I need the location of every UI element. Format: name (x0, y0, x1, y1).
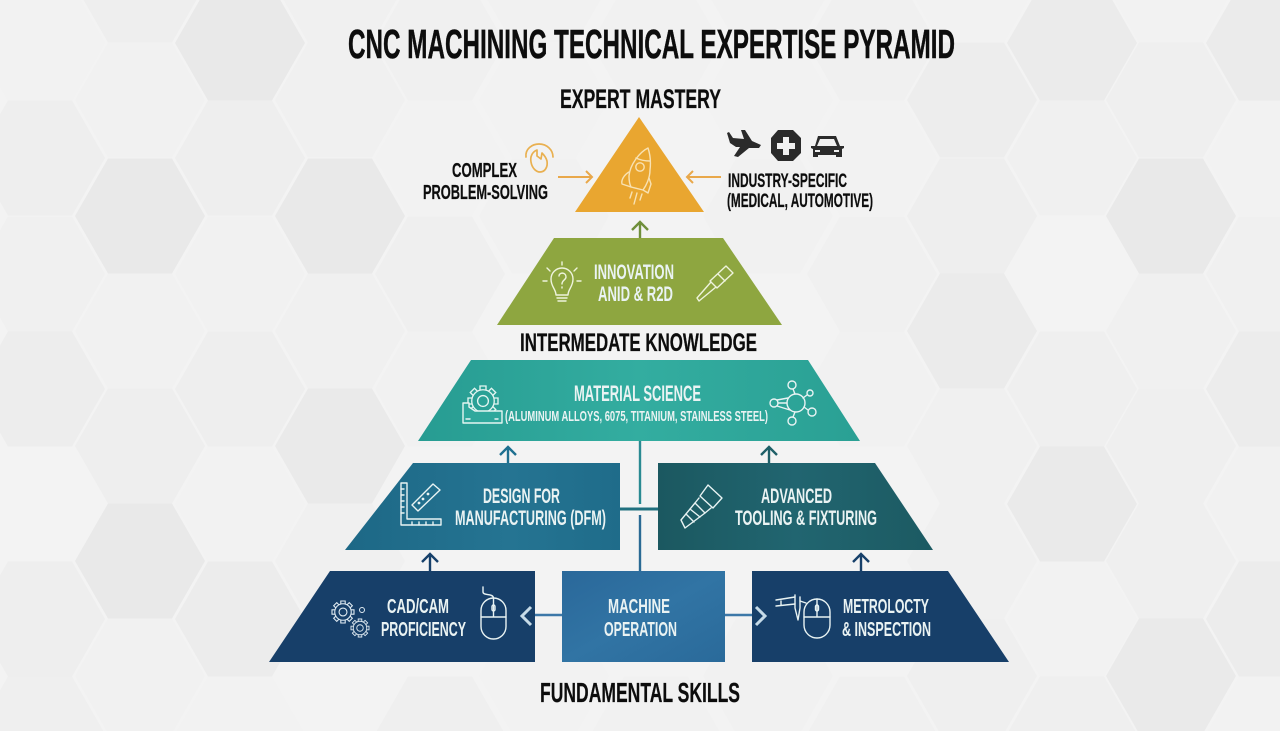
panel: expert mastery triangle (575, 117, 704, 212)
text: advanced tooling: TOOLING & FIXTURING (735, 507, 877, 530)
panel: design for manufacturing (345, 463, 620, 550)
icon: rocket (622, 148, 651, 204)
text: innovation: ANID & R2D (598, 283, 673, 306)
text: material science: MATERIAL SCIENCE (574, 381, 701, 406)
icon: caliper (776, 595, 806, 620)
text: design for manufacturing: MANUFACTURING (DFM) (455, 507, 606, 530)
panel: advanced tooling (658, 463, 933, 550)
text: material science: (ALUMINUM ALLOYS, 6075, TITANIUM, STAINLESS STEEL) (505, 408, 768, 425)
panel: metrology and inspection (752, 571, 1009, 662)
icon: medical cross (771, 130, 801, 161)
arrow: tooling up to material (761, 447, 777, 463)
text: complex problem-solving: PROBLEM-SOLVING (423, 182, 548, 204)
heading: expert mastery: EXPERT MASTERY (560, 84, 721, 114)
text: machine operation: OPERATION (604, 619, 677, 641)
text: industry-specific (727, 170, 873, 212)
text: innovation: INNOVATION (594, 261, 674, 284)
text: metrology and inspection: METROLOCTY (843, 596, 929, 618)
text: cad/cam proficiency (381, 596, 466, 641)
icon: gears (332, 601, 369, 637)
panel: material science (418, 360, 860, 441)
text: industry-specific: (MEDICAL, AUTOMOTIVE) (727, 190, 873, 212)
icon: drill bit (681, 485, 722, 528)
text: innovation (594, 261, 674, 306)
panel: machine operation (562, 571, 725, 662)
connector: central spine (620, 441, 658, 571)
icons: plane, medical cross, car (727, 130, 844, 161)
text: metrology and inspection (842, 596, 931, 641)
arrow: cad/cam up to design (422, 554, 438, 571)
arrow: machine to cad/cam (522, 607, 562, 625)
text: cad/cam proficiency: PROFICIENCY (381, 619, 466, 641)
text: cad/cam proficiency: CAD/CAM (387, 596, 449, 618)
arrow: problem-solving to apex (558, 171, 592, 183)
text: advanced tooling: ADVANCED (761, 485, 832, 508)
arrow: design up to material (500, 447, 516, 463)
icon: square and ruler (401, 483, 441, 525)
text: metrology and inspection: & INSPECTION (842, 619, 931, 641)
text: industry-specific: INDUSTRY-SPECIFIC (728, 170, 847, 192)
panel: cad/cam proficiency (269, 571, 535, 662)
icon: gear and plate (463, 386, 502, 423)
text: design for manufacturing: DESIGN FOR (483, 485, 560, 508)
arrow: innovation up to expert (632, 222, 648, 238)
icon: car (811, 136, 844, 157)
text: material science (505, 381, 768, 425)
panel: innovation (497, 238, 782, 325)
text: design for manufacturing (455, 485, 606, 530)
arrow: machine to metrology (725, 607, 765, 625)
icon: screwdriver (697, 266, 733, 301)
text: advanced tooling (735, 485, 877, 530)
text: complex problem-solving (423, 160, 548, 204)
icon: mouse (481, 587, 506, 639)
arrow: industry to apex (687, 171, 721, 183)
text: machine operation (604, 596, 677, 641)
icon: problem-solving flame (526, 144, 553, 172)
text: complex problem-solving: COMPLEX (452, 160, 517, 182)
icon: lightbulb (543, 262, 581, 301)
text: machine operation: MACHINE (608, 596, 670, 618)
heading: fundamental skills: FUNDAMENTAL SKILLS (540, 677, 740, 708)
heading: intermediate knowledge: INTERMEDATE KNOWLEDGE (520, 329, 757, 357)
icon: molecule (770, 381, 816, 425)
arrow: metrology up to tooling (853, 554, 869, 571)
icon: plane (727, 130, 761, 157)
icon: mouse (804, 599, 830, 638)
